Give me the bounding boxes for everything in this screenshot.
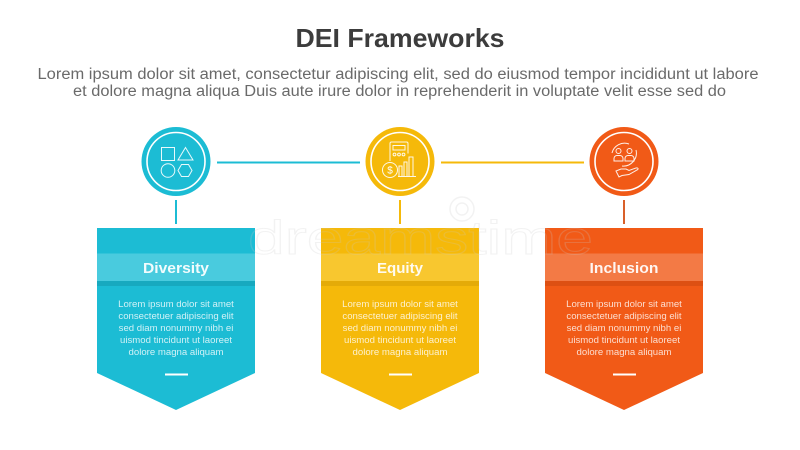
icon circle: equity calculator and chart: $ (387, 166, 393, 176)
panel: diversity (97, 127, 255, 410)
dash (165, 374, 188, 376)
band shadow (97, 281, 255, 286)
body text: dolore magna aliquam (129, 347, 223, 358)
dash (613, 374, 636, 376)
heading band (321, 254, 479, 282)
band shadow (321, 281, 479, 286)
icon circle: equity calculator and chart (366, 127, 434, 196)
body text: Lorem ipsum dolor sit amet (118, 299, 234, 310)
watermark: dreamstime (248, 211, 593, 264)
title: DEI Frameworks (296, 23, 504, 53)
arrow card (321, 228, 479, 410)
arrow card (97, 228, 255, 410)
stem (175, 200, 177, 224)
heading: Inclusion (590, 260, 658, 277)
connector: diversity to equity (217, 162, 360, 164)
body text: uismod tincidunt ut laoreet (568, 335, 680, 346)
icon circle: inclusion people in hand (590, 127, 658, 196)
watermark (248, 197, 593, 264)
heading band (97, 254, 255, 282)
heading: Equity (377, 260, 424, 277)
heading: Diversity (143, 260, 210, 277)
body text: sed diam nonummy nibh ei (343, 323, 457, 334)
panel: inclusion (545, 127, 703, 410)
body text: uismod tincidunt ut laoreet (120, 335, 232, 346)
body text: consectetuer adipiscing elit (342, 311, 458, 322)
icon circle: diversity shapes (142, 127, 210, 196)
panel: equity (321, 127, 479, 410)
body text: dolore magna aliquam (353, 347, 447, 358)
dash (389, 374, 412, 376)
stem (399, 200, 401, 224)
body text: Lorem ipsum dolor sit amet (342, 299, 458, 310)
body text: uismod tincidunt ut laoreet (344, 335, 456, 346)
body text (118, 299, 234, 358)
arrow card (545, 228, 703, 410)
stem (623, 200, 625, 224)
body text: consectetuer adipiscing elit (566, 311, 682, 322)
band shadow (545, 281, 703, 286)
subtitle text (38, 66, 758, 100)
subtitle text: Lorem ipsum dolor sit amet, consectetur adipiscing elit, sed do eiusmod tempor incididunt ut labore (38, 66, 758, 83)
subtitle text: et dolore magna aliqua Duis aute irure dolor in reprehenderit in voluptate velit esse sed do (73, 83, 726, 100)
body text: sed diam nonummy nibh ei (119, 323, 233, 334)
body text: Lorem ipsum dolor sit amet (566, 299, 682, 310)
body text: dolore magna aliquam (577, 347, 671, 358)
body text (566, 299, 682, 358)
body text: consectetuer adipiscing elit (118, 311, 234, 322)
connector: equity to inclusion (441, 162, 584, 164)
body text (342, 299, 458, 358)
heading band (545, 254, 703, 282)
body text: sed diam nonummy nibh ei (567, 323, 681, 334)
